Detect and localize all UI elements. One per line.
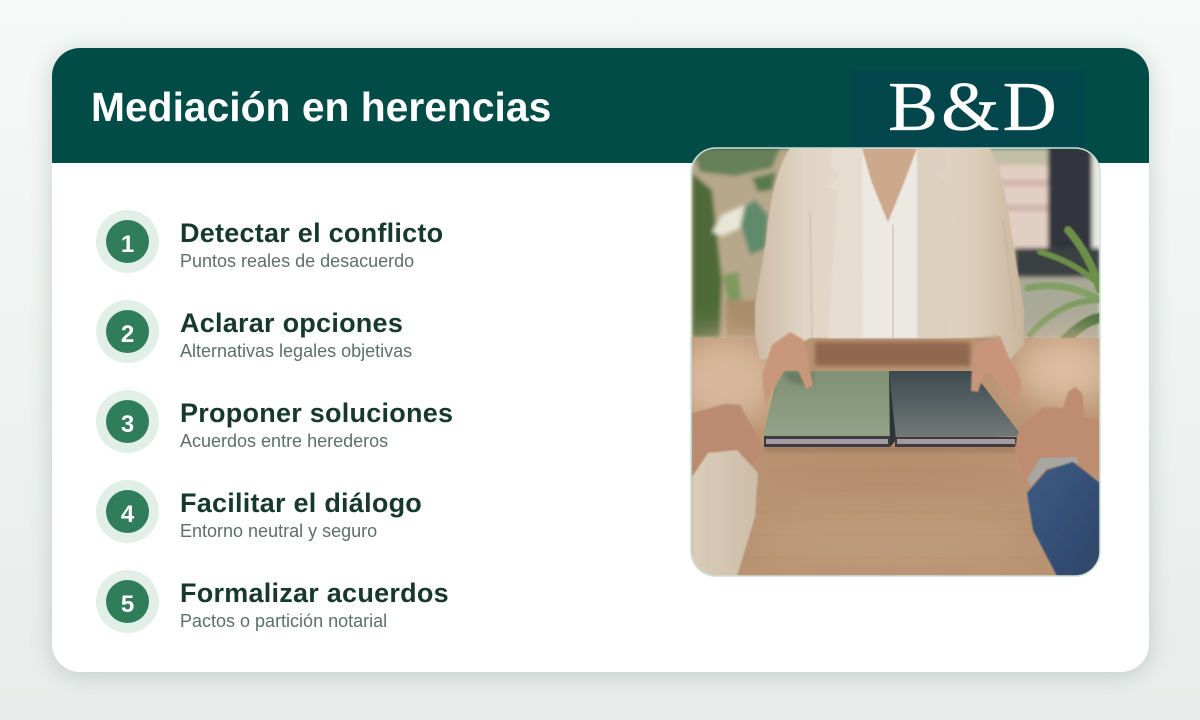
step 3: proponer soluciones [96, 390, 453, 453]
number badge 3: 3 [121, 411, 134, 438]
step 3 description: Acuerdos entre herederos [180, 431, 388, 451]
left seated person [692, 404, 760, 470]
step 5 description: Pactos o partición notarial [180, 611, 387, 631]
table [691, 338, 1100, 578]
jacket sleeve seams [810, 213, 1015, 338]
header band [52, 48, 1149, 163]
step 4 heading: Facilitar el diálogo [180, 488, 422, 518]
jacket [755, 148, 1024, 362]
step 4 description: Entorno neutral y seguro [180, 521, 377, 541]
right seated person [1014, 387, 1099, 451]
blurred office background [691, 148, 1100, 340]
hands on folders [762, 332, 813, 407]
photo border [691, 148, 1100, 576]
number badge 4 [96, 480, 159, 543]
number badge 1 [96, 210, 159, 273]
logo: B&D: B&D [888, 69, 1060, 146]
palm plant at the right [1028, 230, 1100, 340]
title: Mediación en herencias [91, 84, 551, 130]
shirt and neck [860, 148, 920, 338]
folders [763, 371, 890, 437]
number badge 2: 2 [121, 321, 134, 348]
step 2 description: Alternativas legales objetivas [180, 341, 412, 361]
number badge 5: 5 [121, 591, 134, 618]
panel: main card [52, 48, 1149, 672]
photo: mediation at a wooden table [690, 147, 1101, 577]
shadow under folders [764, 446, 1016, 452]
lapels [827, 148, 863, 338]
step 5 heading: Formalizar acuerdos [180, 578, 449, 608]
number badge 4: 4 [121, 501, 134, 528]
step 2 heading: Aclarar opciones [180, 308, 403, 338]
number badge 5 [96, 570, 159, 633]
number badge 2 [96, 300, 159, 363]
step 1 description: Puntos reales de desacuerdo [180, 251, 414, 271]
number badge 3 [96, 390, 159, 453]
step 3 heading: Proponer soluciones [180, 398, 453, 428]
step 2: aclarar opciones [96, 300, 412, 363]
step 5: formalizar acuerdos [96, 570, 449, 633]
number badge 1: 1 [121, 231, 134, 258]
step 4: facilitar el diálogo [96, 480, 422, 543]
step 1 heading: Detectar el conflicto [180, 218, 443, 248]
step 1: detectar el conflicto [96, 210, 443, 273]
